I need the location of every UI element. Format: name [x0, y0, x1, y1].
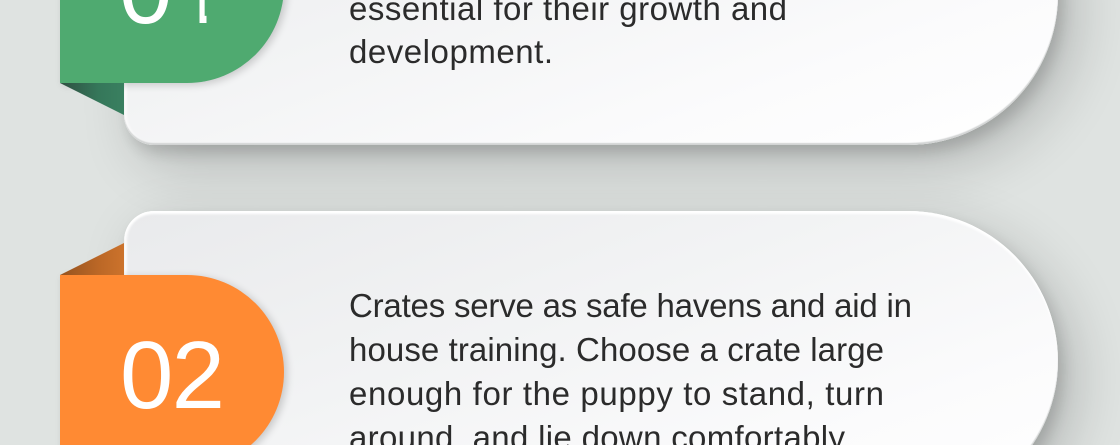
panel: card 02: [124, 211, 1058, 445]
text block: card 02: [349, 287, 912, 445]
number 01: [123, 0, 206, 24]
number tab: 01 green: [60, 0, 284, 83]
panel: card 01: [124, 0, 1058, 145]
text block: card 02: house training. Choose a crate large: [349, 331, 884, 368]
fold: green ribbon: [60, 83, 124, 115]
text block: card 01: [349, 0, 787, 70]
fold: orange ribbon: [60, 243, 124, 275]
text block: card 01: development.: [349, 33, 553, 70]
number 02: 02: [120, 322, 225, 429]
text block: card 02: enough for the puppy to stand, turn: [349, 375, 884, 412]
text block: card 02: Crates serve as safe havens and aid in: [349, 287, 912, 324]
folds, numbers and text: [60, 0, 910, 445]
number tab: 02 orange: [60, 275, 284, 445]
